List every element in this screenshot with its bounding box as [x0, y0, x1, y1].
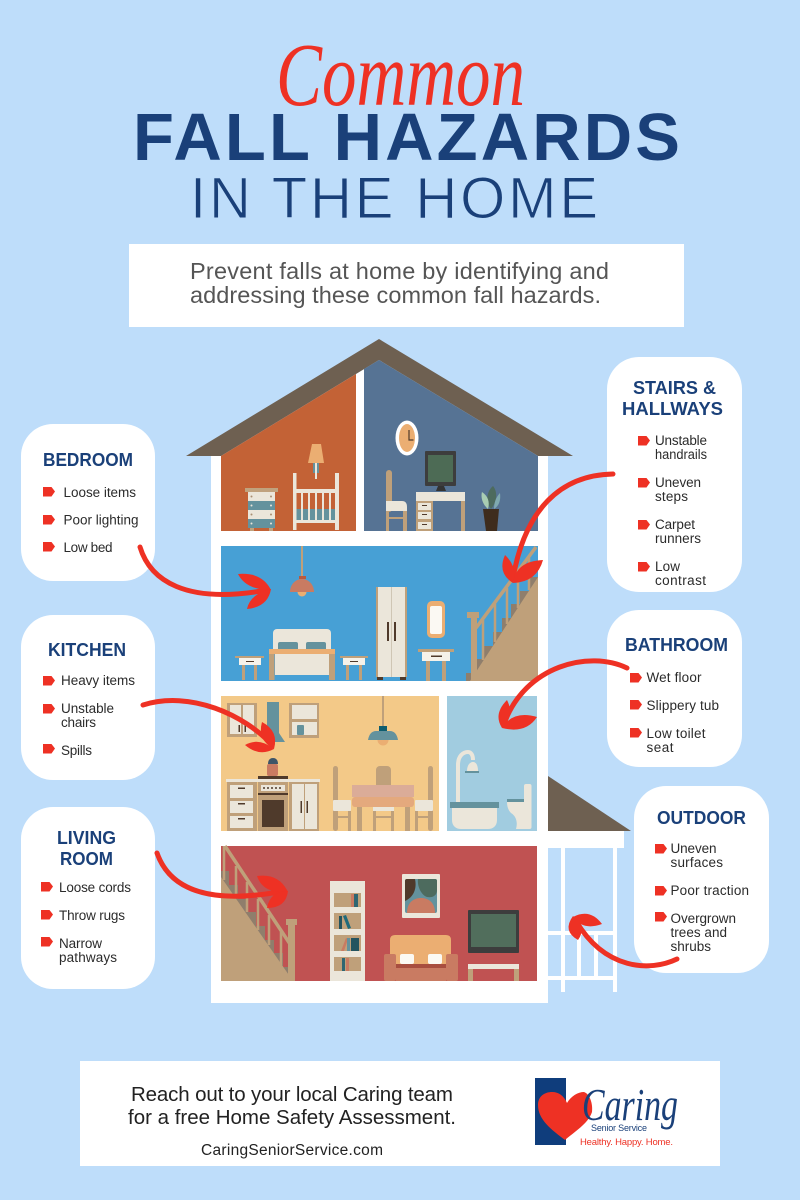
panel: outdoor: Uneven — [670, 841, 716, 856]
nightstand right — [340, 656, 368, 680]
panel: stairs and hallways — [607, 357, 742, 592]
subtitle box: Prevent falls at home by identifying and — [190, 258, 609, 284]
kitchen window — [227, 703, 257, 737]
panel: kitchen: chairs — [61, 715, 96, 730]
plant — [482, 486, 500, 531]
panel: bathroom — [607, 610, 742, 767]
heading: kitchen: KITCHEN — [48, 639, 126, 660]
panel: kitchen: Unstable — [61, 701, 114, 716]
staircase down — [221, 846, 297, 981]
website: CaringSeniorService.com — [201, 1142, 383, 1159]
panel: living room — [21, 807, 155, 989]
room: bathroom — [447, 696, 537, 831]
porch roof — [548, 776, 631, 831]
nightstand left — [235, 656, 264, 680]
heading: bedroom: BEDROOM — [43, 449, 133, 470]
porch beam — [548, 831, 624, 848]
panel: stairs and hallways: runners — [655, 531, 701, 546]
panel: living room: Loose cords — [59, 880, 131, 895]
pendant lamp — [368, 696, 398, 746]
panel: living room: Narrow — [59, 936, 102, 951]
kitchen counter — [226, 776, 320, 831]
arrow: stairs — [502, 474, 613, 583]
panel: stairs and hallways: Uneven — [655, 475, 701, 490]
shelf window with mug — [289, 703, 319, 738]
roof — [186, 339, 573, 456]
arrow: bathroom — [498, 661, 627, 730]
arrow: kitchen — [143, 701, 275, 752]
panel: bedroom: Poor lighting — [64, 512, 138, 528]
subtitle box — [129, 244, 684, 327]
tv table — [468, 964, 519, 981]
heading: living room: LIVING — [57, 827, 116, 848]
porch railing — [548, 848, 617, 992]
pendant light — [290, 546, 314, 596]
lamp — [308, 444, 324, 479]
title — [133, 26, 680, 231]
panel: bathroom: Wet floor — [646, 670, 702, 685]
computer monitor — [425, 451, 456, 491]
panel: outdoor: shrubs — [670, 939, 711, 954]
heading: bathroom: BATHROOM — [625, 634, 728, 655]
logo: Senior Service — [591, 1123, 647, 1133]
panel: stairs and hallways: steps — [655, 489, 688, 504]
drawers — [227, 782, 257, 831]
panel: kitchen: Heavy items — [61, 673, 135, 688]
panel: bedroom: Loose items — [64, 485, 136, 500]
panel: stairs and hallways: Carpet — [655, 517, 695, 532]
panel: kitchen — [21, 615, 155, 780]
arrow: bedroom — [140, 547, 271, 609]
bed — [269, 629, 335, 680]
house body — [211, 360, 548, 1003]
stove — [258, 782, 288, 831]
panel: living room: pathways — [59, 950, 117, 965]
panel: stairs and hallways: Unstable — [655, 433, 707, 448]
bathtub — [450, 802, 499, 829]
call to action: for a free Home Safety Assessment. — [128, 1106, 456, 1129]
crib — [293, 473, 339, 530]
wall art — [402, 874, 440, 918]
chair — [386, 470, 407, 531]
panel: stairs and hallways: handrails — [655, 447, 707, 462]
title script: Common: Common — [276, 26, 525, 125]
panel: outdoor — [634, 786, 769, 973]
panel: bathroom: Low toilet — [646, 726, 706, 741]
cabinet — [289, 782, 319, 831]
panel: bedroom — [21, 424, 155, 581]
panel: outdoor: Poor traction — [670, 883, 749, 898]
toilet — [507, 784, 532, 829]
room: nursery — [221, 374, 356, 531]
panel: outdoor: surfaces — [670, 855, 723, 870]
footer panel — [80, 1061, 720, 1166]
staircase up — [466, 547, 538, 681]
bookshelf — [330, 881, 365, 981]
logo — [535, 1078, 678, 1148]
pot — [267, 758, 278, 776]
panel: bedroom: Low bed — [64, 540, 112, 555]
console table — [418, 649, 454, 681]
panel: stairs and hallways: Low — [655, 559, 680, 574]
heading: living room — [57, 827, 116, 869]
house illustration — [186, 339, 631, 1003]
arrow: living room — [157, 853, 288, 908]
call to action — [128, 1083, 456, 1129]
mirror — [427, 601, 445, 638]
logo: Caring — [582, 1079, 678, 1130]
room: bedroom — [221, 546, 538, 681]
shower — [458, 752, 479, 802]
heading: stairs and hallways: HALLWAYS — [622, 398, 723, 419]
dining set — [333, 766, 433, 831]
heading: stairs and hallways: STAIRS & — [633, 377, 716, 398]
wardrobe — [376, 587, 407, 680]
room: living room — [221, 846, 537, 981]
heading: stairs and hallways — [622, 377, 723, 419]
heading: outdoor: OUTDOOR — [657, 807, 746, 828]
range hood — [267, 702, 285, 742]
arrow: outdoor — [569, 914, 677, 966]
panel: outdoor: trees and — [670, 925, 727, 940]
panel: outdoor: Overgrown — [670, 911, 736, 926]
panel: stairs and hallways: contrast — [655, 573, 706, 588]
title: Fall Hazards: FALL HAZARDS — [133, 100, 680, 175]
panel: living room: Throw rugs — [59, 908, 125, 923]
room: study — [364, 360, 538, 531]
panel: bathroom: Slippery tub — [646, 698, 719, 713]
porch — [548, 776, 631, 992]
dresser — [245, 488, 278, 531]
panel: kitchen: Spills — [61, 743, 92, 758]
title: In the Home: IN THE HOME — [190, 166, 598, 231]
logo: Healthy. Happy. Home. — [580, 1137, 673, 1148]
subtitle box: addressing these common fall hazards. — [190, 282, 601, 308]
desk — [416, 492, 465, 531]
sofa — [384, 935, 458, 981]
room: kitchen — [221, 696, 439, 831]
television — [468, 910, 519, 953]
heading: living room: ROOM — [60, 848, 113, 869]
call to action: Reach out to your local Caring team — [131, 1083, 453, 1106]
clock — [396, 420, 418, 456]
panel: bathroom: seat — [646, 740, 674, 755]
